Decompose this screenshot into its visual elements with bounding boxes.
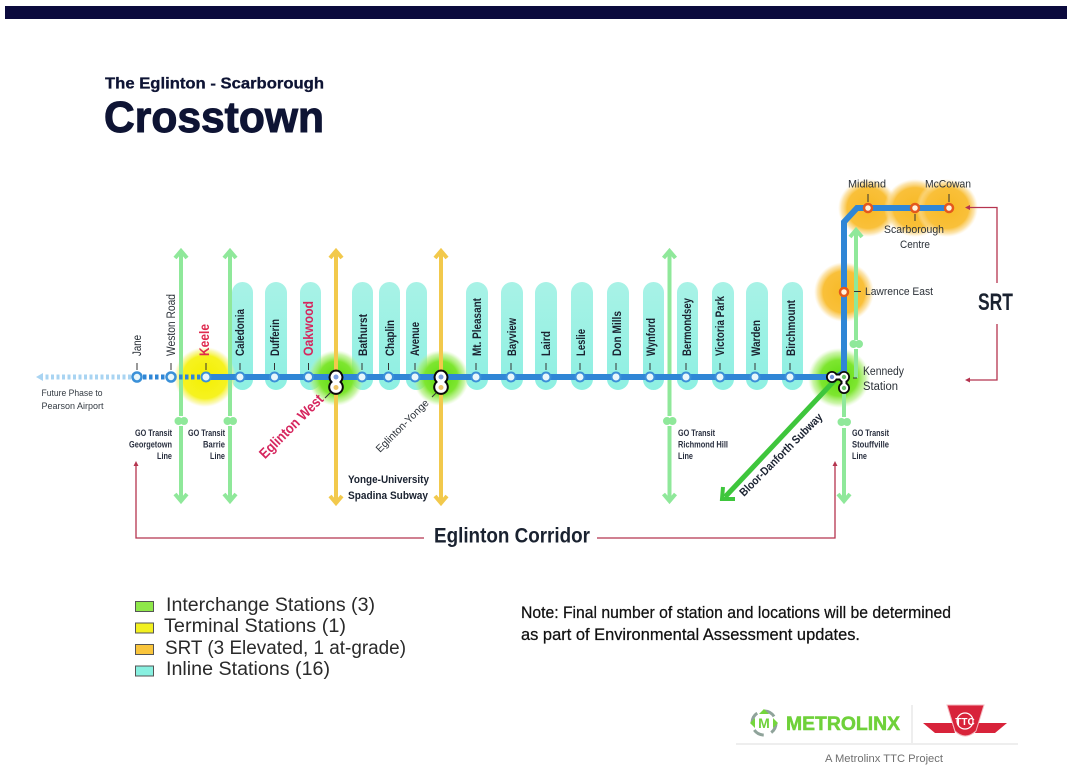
station labels: Caledonia [235,308,247,356]
title: The Eglinton - Scarborough [105,76,324,92]
Yonge-University Spadina subway lines [330,251,447,503]
logo caption: A Metrolinx TTC Project [825,753,943,765]
station labels: Mt. Pleasant [472,298,484,356]
station labels: Oakwood [301,301,316,356]
SRT bracket and label: SRT [978,289,1013,316]
GO Transit Georgetown label: GO Transit [135,428,172,438]
GO Transit Georgetown label: Georgetown [129,440,172,450]
station labels: Bermondsey [682,298,694,356]
GO Transit Richmond Hill label [678,428,728,461]
station labels: Chaplin [385,320,397,356]
GO Transit Richmond Hill label: Line [678,451,693,461]
top header bar [5,6,1067,19]
legend: Terminal Stations (1) [164,616,346,637]
station labels: Keele [197,324,212,356]
station labels: Don Mills [612,311,624,356]
GO Transit Barrie label: Barrie [203,440,225,450]
note: as part of Environmental Assessment updates. [521,625,860,644]
interchange diagonal labels: Eglinton West [257,392,327,462]
Eglinton Corridor bracket and label [134,461,838,548]
station labels [132,294,798,356]
inline station markers [132,372,794,382]
logo divider [736,705,1018,744]
interchange: Kennedy [826,371,850,394]
logo: Metrolinx: M [758,715,770,731]
GO Transit Stouffville label: Line [852,451,867,461]
logo: TTC [923,705,1007,736]
interchange diagonal labels [257,392,826,499]
SRT station labels: Scarborough [884,224,944,236]
GO Transit Barrie label [188,428,225,461]
station labels: Bayview [507,318,519,356]
Kennedy Station label [863,366,904,393]
station labels: Leslie [576,329,588,356]
future phase label: Future Phase to [42,388,102,399]
SRT station labels: McCowan [925,178,971,190]
logo: Metrolinx: METROLINX [786,714,900,735]
station labels: Wynford [646,318,658,356]
GO Transit Georgetown label: Line [157,451,172,461]
station labels: Warden [751,320,763,356]
future phase dotted line [36,373,200,381]
Eglinton Corridor bracket and label: Eglinton Corridor [434,524,590,548]
station labels: Weston Road [166,294,178,356]
logo: TTC: TTC [955,717,975,728]
Bloor-Danforth subway arrow [722,380,835,499]
interchange diagonal labels: Bloor-Danforth Subway [738,411,826,499]
interchange diagonal labels: Eglinton-Yonge [374,397,432,455]
interchange: Eglinton-Yonge [434,370,448,394]
Kennedy Station label: Station [863,381,898,393]
station glows [174,179,978,408]
station labels: Jane [132,335,144,356]
Crosstown main line [206,208,949,377]
logo: Metrolinx [750,709,900,735]
station ticks [137,194,949,398]
inline station background pills [232,282,803,390]
Yonge-University Spadina Subway label: Yonge-University [348,474,430,486]
Kennedy Station label: Kennedy [863,366,904,378]
GO Transit Georgetown label [129,428,172,461]
legend: SRT (3 Elevated, 1 at-grade) [165,638,406,659]
GO Transit Barrie label: Line [210,451,225,461]
note [521,603,951,644]
legend [136,595,406,680]
future phase label [42,388,104,412]
GO Transit Stouffville label: Stouffville [852,440,889,450]
SRT station labels: Lawrence East [865,286,933,298]
Yonge-University Spadina Subway label [348,474,430,502]
SRT station labels: Midland [848,178,886,190]
GO Transit Stouffville label: GO Transit [852,428,889,438]
title: Crosstown [104,93,324,142]
station labels: Dufferin [270,319,282,356]
Yonge-University Spadina Subway label: Spadina Subway [348,490,429,502]
station labels: Avenue [410,322,422,356]
SRT station labels [848,178,971,298]
legend: Interchange Stations (3) [166,595,375,616]
station labels: Birchmount [786,300,798,356]
station labels: Laird [541,331,553,356]
station labels: Victoria Park [715,295,727,356]
GO Transit lines [175,230,862,501]
interchange: Eglinton West [329,370,343,394]
GO Transit Barrie label: GO Transit [188,428,225,438]
GO Transit Richmond Hill label: Richmond Hill [678,440,728,450]
GO Transit Stouffville label [852,428,889,461]
note: Note: Final number of station and locations will be determined [521,603,951,622]
SRT station labels: Centre [900,239,930,251]
SRT station markers [840,204,953,296]
station labels: Bathurst [358,314,370,356]
legend: Inline Stations (16) [166,659,330,680]
GO Transit Richmond Hill label: GO Transit [678,428,715,438]
SRT bracket and label [965,205,1013,382]
future phase label: Pearson Airport [42,401,104,412]
